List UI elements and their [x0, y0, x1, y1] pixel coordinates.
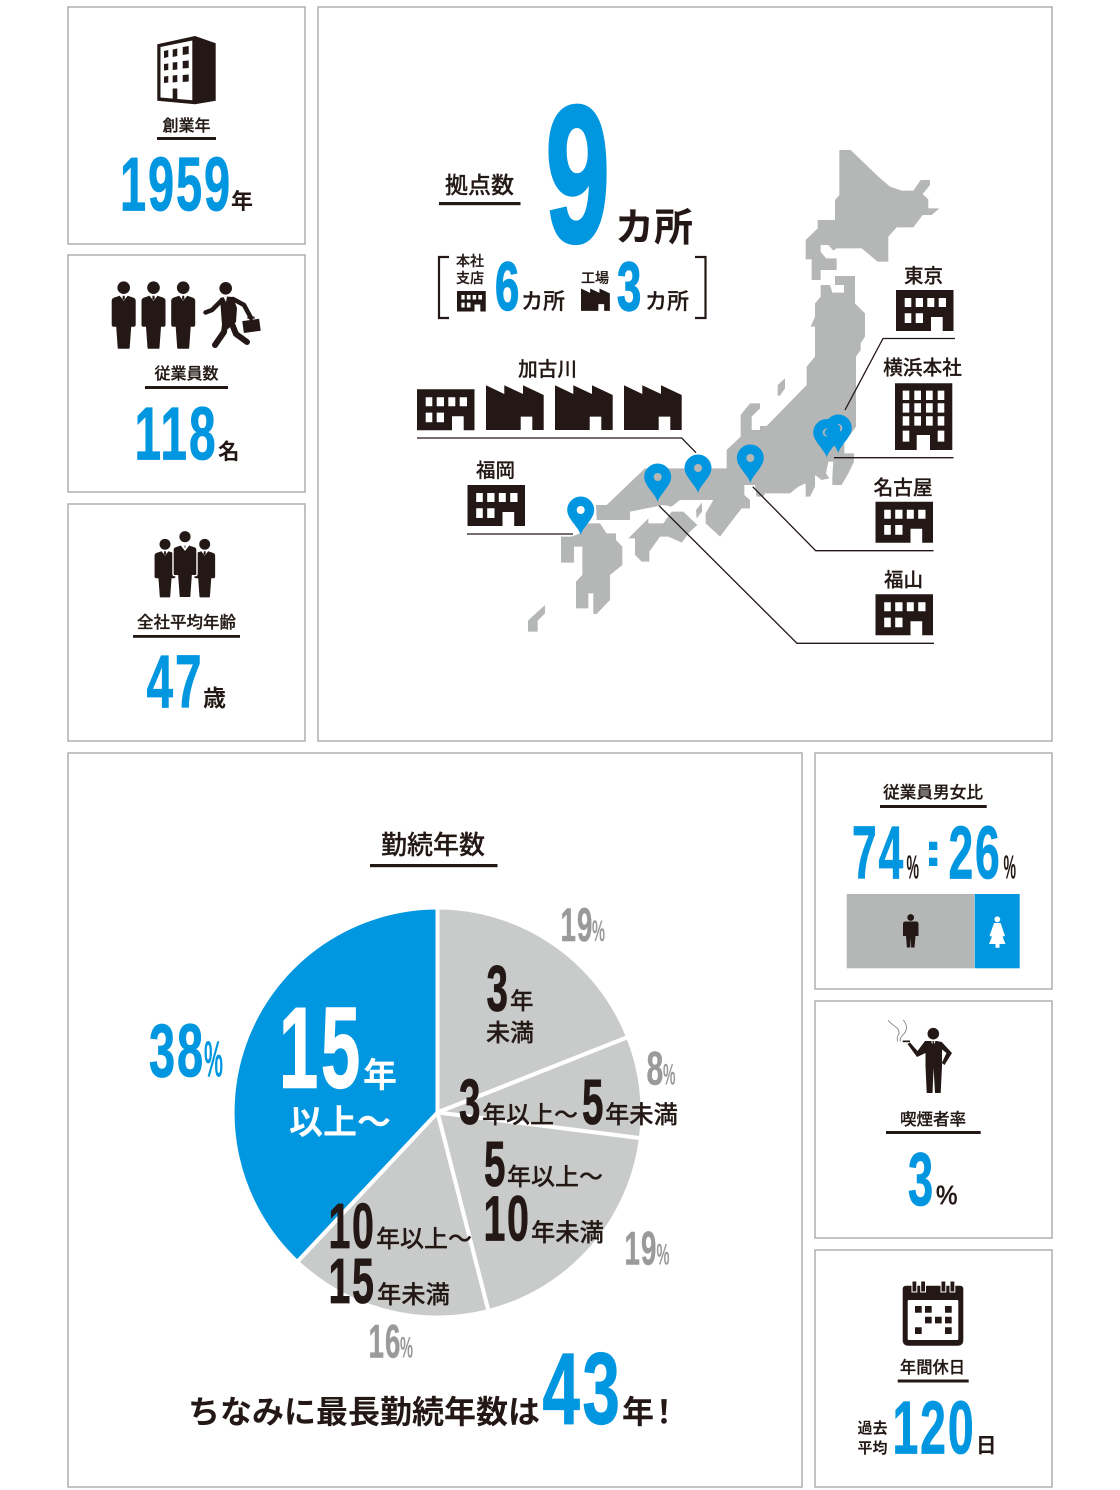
number: 120 days: [858, 1386, 996, 1470]
location: Kakogawa: 加古川: [518, 359, 577, 381]
icon: three standing employees and a runner: [112, 281, 261, 349]
leader: Kakogawa: [417, 438, 696, 453]
callout: longest service 43 years: [188, 1334, 680, 1446]
map pins: Tokyo and Yokohama: [813, 414, 852, 458]
leader: Yokohama: [834, 457, 954, 459]
ratio numbers: 26: [948, 810, 1002, 894]
ratio numbers: 74: [852, 810, 905, 894]
panel: employee count: [68, 255, 305, 492]
callout: longest service 43 years: 43: [542, 1334, 622, 1446]
heading: years of service: 勤続年数: [381, 830, 485, 860]
breakdown: offices and factories: カ所: [521, 289, 565, 314]
label: 5 to 10 years, 19%: 年以上～: [507, 1164, 603, 1191]
location: Fukuyama: [876, 570, 933, 635]
location: Tokyo: 東京: [904, 266, 943, 288]
label: 10 to 15 years, 16%: 年以上～: [376, 1226, 472, 1253]
label: 10 to 15 years, 16%: %: [400, 1332, 413, 1364]
map pin: Nagoya: [737, 444, 764, 483]
number: 1959: 1959: [120, 142, 232, 228]
panel: smoking rate: [815, 1001, 1052, 1238]
panel: years of service: %: [656, 1238, 670, 1272]
leader: Fukuyama: [659, 506, 934, 643]
location: Fukuyama: 福山: [884, 570, 923, 592]
number: 9 locations: 9: [546, 66, 614, 284]
location: Tokyo: [896, 266, 954, 331]
label: 10 to 15 years, 16%: 年未満: [377, 1282, 450, 1309]
location: Yokohama head office: [883, 358, 962, 450]
heading: gender ratio: 従業員男女比: [883, 783, 983, 802]
breakdown: offices and factories: 6: [495, 248, 521, 325]
panel: years of service: [68, 753, 802, 1487]
label: 3 to 5 years, 8%: %: [663, 1058, 676, 1092]
panel: years of service: %: [592, 915, 605, 948]
number: 120 days: 日: [976, 1434, 996, 1458]
ratio numbers: [852, 810, 1016, 894]
map pin: Fukuoka: [567, 496, 594, 535]
icon: smoking man: [888, 1020, 952, 1093]
location: Fukuoka: [468, 460, 525, 526]
label: 15 years or more, 38%: 以上～: [289, 1104, 391, 1142]
heading: annual holidays: 年間休日: [900, 1359, 965, 1377]
map pin: Fukuyama: [644, 464, 671, 502]
label: 10 to 15 years, 16%: [328, 1190, 472, 1368]
label: 15 years or more, 38%: 15: [279, 984, 363, 1112]
icon: calendar: [903, 1281, 963, 1346]
breakdown: offices and factories: [439, 248, 706, 325]
label: under 3 years, 19%: 年: [510, 988, 534, 1014]
location: Fukuoka: 福岡: [476, 460, 515, 482]
callout: longest service 43 years: ちなみに最長勤続年数は: [188, 1394, 540, 1430]
label: 10 to 15 years, 16%: 16: [368, 1314, 402, 1368]
callout: longest service 43 years: ！: [648, 1394, 680, 1430]
pie chart: [233, 908, 643, 1318]
number: 120 days: 平均: [858, 1439, 888, 1457]
breakdown: offices and factories: 3: [617, 248, 643, 325]
label: 5 to 10 years, 19%: 10: [484, 1182, 530, 1254]
label: 3 to 5 years, 8%: 年未満: [605, 1102, 678, 1129]
panel: gender ratio: [815, 753, 1052, 989]
number: 47: 47: [146, 640, 204, 724]
label: 3 to 5 years, 8%: 3: [459, 1066, 482, 1138]
location: Kakogawa: [417, 359, 682, 430]
label: 5 to 10 years, 19%: 5: [484, 1128, 507, 1200]
number: 9 locations: カ所: [615, 207, 693, 250]
heading: average age: 全社平均年齢: [137, 613, 236, 632]
location: Nagoya: 名古屋: [873, 478, 933, 500]
leader: Tokyo: [845, 338, 955, 410]
icon: office building: [157, 36, 216, 104]
label: 3 to 5 years, 8%: 5: [582, 1066, 605, 1138]
location: Nagoya: [873, 478, 933, 543]
label: 5 to 10 years, 19%: [484, 1128, 670, 1274]
panel: locations map: [318, 7, 1052, 741]
breakdown: offices and factories: 支店: [456, 270, 484, 286]
leader: Nagoya: [753, 487, 934, 551]
label: 3 to 5 years, 8%: [459, 1042, 678, 1138]
leader: Fukuoka: [467, 533, 573, 535]
heading: smoking rate: 喫煙者率: [900, 1110, 966, 1129]
label: under 3 years, 19%: 19: [560, 898, 594, 951]
map pin: Kakogawa: [684, 454, 712, 493]
breakdown: offices and factories: 本社: [456, 253, 484, 269]
label: 10 to 15 years, 16%: 15: [328, 1245, 376, 1317]
unit: years old: 歳: [203, 685, 226, 711]
callout: longest service 43 years: 年: [622, 1394, 654, 1430]
number: 3%: 3: [908, 1137, 935, 1221]
number: 120 days: 120: [892, 1386, 976, 1470]
label: 10 to 15 years, 16%: 10: [328, 1190, 376, 1262]
panel: founding year: [68, 7, 305, 244]
label: 15 years or more, 38%: [149, 984, 397, 1142]
label: 3 to 5 years, 8%: 年以上～: [482, 1102, 578, 1129]
heading: employee count: 従業員数: [154, 365, 219, 383]
label: 3 to 5 years, 8%: 8: [646, 1042, 664, 1094]
label: 15 years or more, 38%: 年: [363, 1057, 397, 1095]
label: 5 to 10 years, 19%: 年未満: [531, 1220, 604, 1247]
heading: number of locations: 拠点数: [445, 172, 514, 198]
panel: gender ratio: %: [1004, 848, 1016, 886]
label: under 3 years, 19%: [486, 898, 605, 1047]
breakdown: offices and factories: 工場: [581, 270, 609, 286]
bar: female share: [975, 894, 1020, 968]
map of Japan: [528, 150, 939, 632]
bar: male share: [847, 894, 974, 968]
heading: founding year: 創業年: [162, 117, 211, 135]
number: 118: 118: [134, 392, 218, 476]
label: under 3 years, 19%: 3: [486, 952, 510, 1025]
label: under 3 years, 19%: 未満: [486, 1020, 534, 1047]
number: 120 days: 過去: [858, 1420, 888, 1437]
icon: three employees group: [155, 530, 215, 598]
breakdown: offices and factories: カ所: [645, 289, 689, 314]
location: Yokohama head office: 横浜本社: [883, 358, 962, 380]
panel: average age: [68, 504, 305, 741]
unit: year: 年: [231, 189, 253, 214]
panel: annual holidays: [815, 1250, 1052, 1487]
ratio numbers: %: [906, 848, 919, 886]
label: 5 to 10 years, 19%: 19: [624, 1222, 658, 1274]
unit: people: 名: [218, 440, 240, 464]
label: 15 years or more, 38%: 38: [149, 1008, 205, 1092]
label: 15 years or more, 38%: %: [204, 1030, 223, 1088]
number: 3%: %: [936, 1180, 958, 1210]
